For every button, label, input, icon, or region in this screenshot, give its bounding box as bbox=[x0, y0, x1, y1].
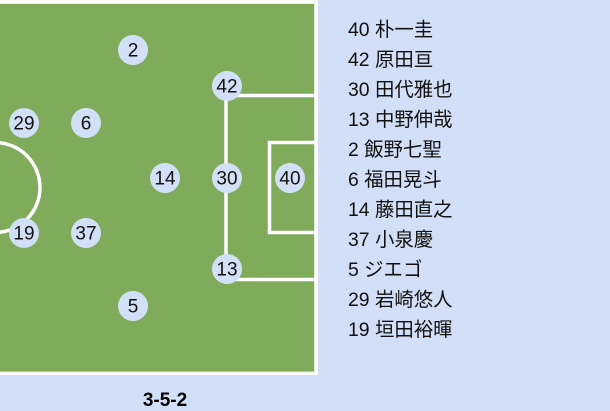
player roster list: 2 飯野七聖 bbox=[348, 139, 442, 161]
pitch diagram bbox=[0, 0, 318, 375]
player roster list: 42 原田亘 bbox=[348, 49, 433, 71]
player 5 bbox=[118, 291, 148, 321]
player roster list: 5 ジエゴ bbox=[348, 259, 422, 281]
penalty area bbox=[226, 96, 316, 280]
player 30: 30 bbox=[216, 168, 238, 190]
player 19 bbox=[9, 218, 39, 248]
player 30 bbox=[212, 163, 242, 193]
player 5: 5 bbox=[128, 296, 138, 318]
player 29 bbox=[9, 108, 39, 138]
player 14: 14 bbox=[154, 168, 176, 190]
player roster list: 29 岩崎悠人 bbox=[348, 289, 453, 311]
player 29: 29 bbox=[13, 114, 35, 134]
player 40: 40 bbox=[279, 168, 301, 190]
player 2 bbox=[118, 35, 148, 65]
player 2: 2 bbox=[128, 40, 138, 62]
player roster list: 30 田代雅也 bbox=[348, 79, 453, 101]
player roster list: 14 藤田直之 bbox=[348, 199, 453, 221]
player roster list: 19 垣田裕暉 bbox=[348, 319, 453, 341]
pitch edge tint bbox=[0, 3, 315, 372]
pitch border bbox=[0, 0, 318, 375]
pitch surface bbox=[0, 4, 314, 372]
player 19: 19 bbox=[13, 224, 35, 244]
player 37 bbox=[71, 218, 101, 248]
player 6: 6 bbox=[81, 114, 91, 134]
player 13: 13 bbox=[216, 260, 238, 280]
player roster list: 6 福田晃斗 bbox=[348, 169, 442, 191]
player 40 bbox=[275, 163, 305, 193]
player 42: 42 bbox=[216, 76, 238, 98]
player 42 bbox=[212, 71, 242, 101]
player 6 bbox=[71, 108, 101, 138]
player 14 bbox=[150, 163, 180, 193]
player roster list bbox=[348, 19, 453, 341]
formation label: 3-5-2 bbox=[143, 390, 187, 411]
player 37: 37 bbox=[75, 224, 97, 244]
goal area bbox=[270, 142, 316, 232]
player roster list: 13 中野伸哉 bbox=[348, 109, 453, 131]
centre circle bbox=[0, 142, 40, 232]
player roster list: 37 小泉慶 bbox=[348, 229, 433, 251]
player 13 bbox=[212, 254, 242, 284]
player roster list: 40 朴一圭 bbox=[348, 19, 433, 41]
